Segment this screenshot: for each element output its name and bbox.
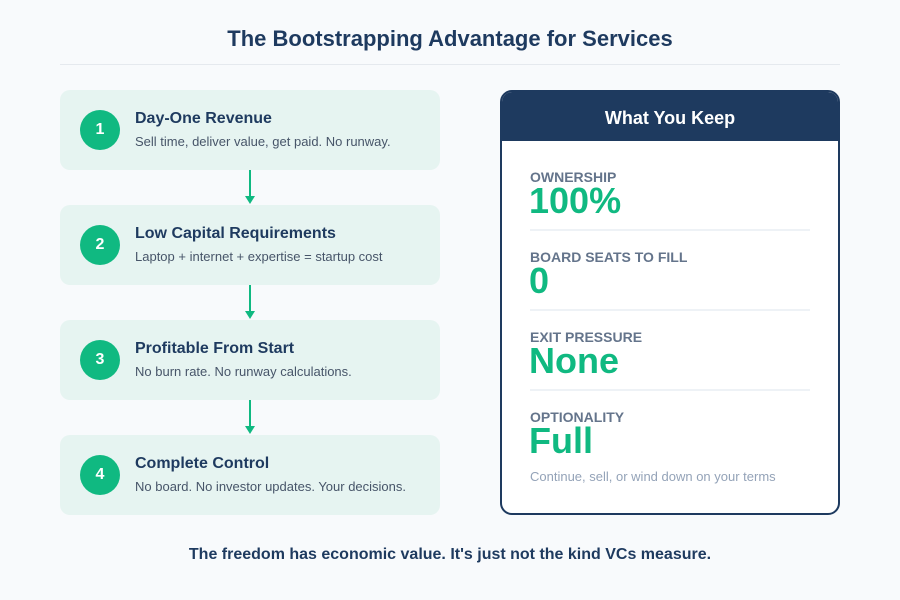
- exit pressure: EXIT PRESSURE: [530, 329, 642, 345]
- panel: what you keep: [500, 90, 840, 515]
- step 1: [60, 90, 440, 170]
- panel: what you keep: 0: [529, 260, 549, 301]
- step 2: Low Capital Requirements: [135, 225, 336, 242]
- step 2: Laptop + internet + expertise = startup cost: [135, 249, 383, 264]
- step 1: 1: [96, 121, 104, 138]
- arrow 2: [245, 285, 255, 319]
- step 1: Sell time, deliver value, get paid. No runway.: [135, 134, 391, 149]
- step 3: Profitable From Start: [135, 340, 294, 357]
- board seats: BOARD SEATS TO FILL: [530, 249, 687, 265]
- step 2: [60, 205, 440, 285]
- panel: what you keep: 100%: [529, 180, 621, 221]
- step 4: Complete Control: [135, 455, 269, 472]
- optionality: OPTIONALITY: [530, 409, 624, 425]
- panel header: [502, 92, 838, 141]
- step 3: 3: [96, 351, 104, 368]
- ownership: OWNERSHIP: [530, 169, 616, 185]
- arrow 1: [245, 170, 255, 204]
- panel header: What You Keep: [605, 108, 735, 128]
- title: The Bootstrapping Advantage for Services: [227, 26, 673, 51]
- step 4: [60, 435, 440, 515]
- step 1: Day-One Revenue: [135, 110, 272, 127]
- arrow 3: [245, 400, 255, 434]
- step 3: No burn rate. No runway calculations.: [135, 364, 352, 379]
- panel: what you keep: Full: [529, 420, 593, 461]
- panel: what you keep: None: [529, 340, 619, 381]
- step 4: 4: [96, 466, 104, 483]
- step 3: [60, 320, 440, 400]
- step 4: No board. No investor updates. Your decisions.: [135, 479, 406, 494]
- step 2: 2: [96, 236, 104, 253]
- bottom caption: The freedom has economic value. It's just not the kind VCs measure.: [189, 546, 711, 563]
- footnote: Continue, sell, or wind down on your terms: [530, 469, 776, 484]
